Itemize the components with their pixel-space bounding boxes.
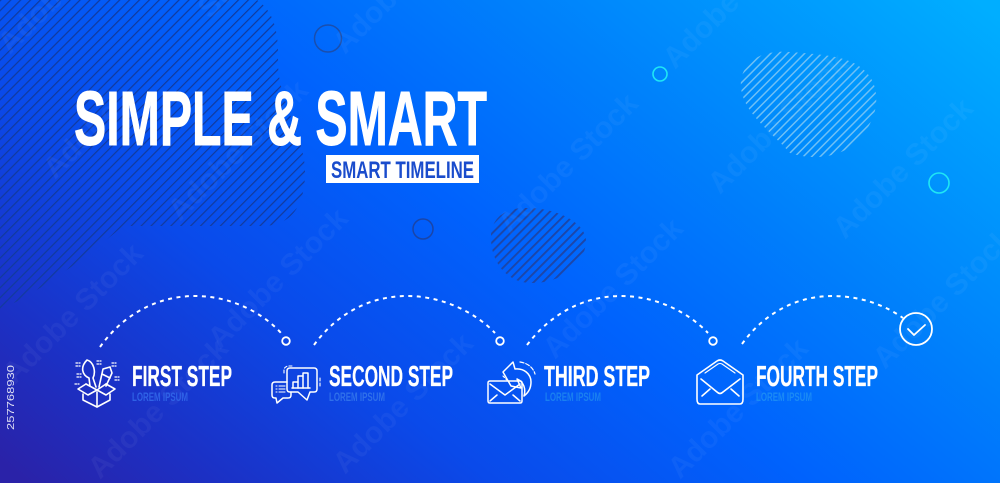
title: SIMPLE & SMART [74,76,487,162]
icon: box with brush and pencil [75,360,119,407]
label: third step: THIRD STEP [544,361,650,393]
watermark text: Adobe Stock [202,202,355,355]
icon: check circle [900,313,932,345]
hatched blob: top right [741,52,876,157]
watermark text: Adobe Stock [827,92,980,245]
outline circle: cyan small [653,67,667,81]
outline circle: dark top [314,25,342,52]
watermark text: Adobe Stock [162,74,315,227]
label: first step: LOREM IPSUM [132,392,188,404]
label: second step: SECOND STEP [329,361,453,393]
label: fourth step: LOREM IPSUM [756,392,812,404]
subtitle badge [326,155,479,184]
side stock number: 257768930 [6,364,17,430]
watermark text: Adobe Stock [492,87,645,240]
watermark text: Adobe Stock [537,212,690,365]
dashed arc: step 1 [100,296,281,347]
watermark text: Adobe Stock [0,237,150,390]
label: fourth step [756,361,878,404]
node: step 1 [282,337,290,345]
hatched blob: top left [0,0,305,310]
label: first step [132,361,232,404]
label: first step: FIRST STEP [132,361,232,393]
dashed arc: step 4 [742,296,903,344]
outline circle: cyan large [929,173,949,193]
label: third step [544,361,650,404]
hatched blob: centre [491,208,586,283]
subtitle badge: SMART TIMELINE [331,157,474,184]
watermark text: Adobe Stock [702,47,855,200]
label: second step [329,361,453,404]
watermark text: Adobe Stock [662,332,815,483]
icon: open envelope [697,360,743,404]
icon: envelope with arrow [488,362,535,403]
dashed arc: step 3 [527,296,708,345]
label: third step: LOREM IPSUM [545,392,601,404]
node: step 3 [709,337,717,345]
label: second step: LOREM IPSUM [329,392,385,404]
dashed arc: step 2 [314,296,495,345]
watermark text: Adobe Stock [327,327,480,480]
label: fourth step: FOURTH STEP [756,361,878,393]
outline circle: dark centre [413,219,433,239]
watermark text: Adobe [37,96,126,185]
icon: chat bubbles with chart [272,366,320,403]
node: step 2 [496,337,504,345]
watermark text: Adobe Stock [82,332,235,483]
